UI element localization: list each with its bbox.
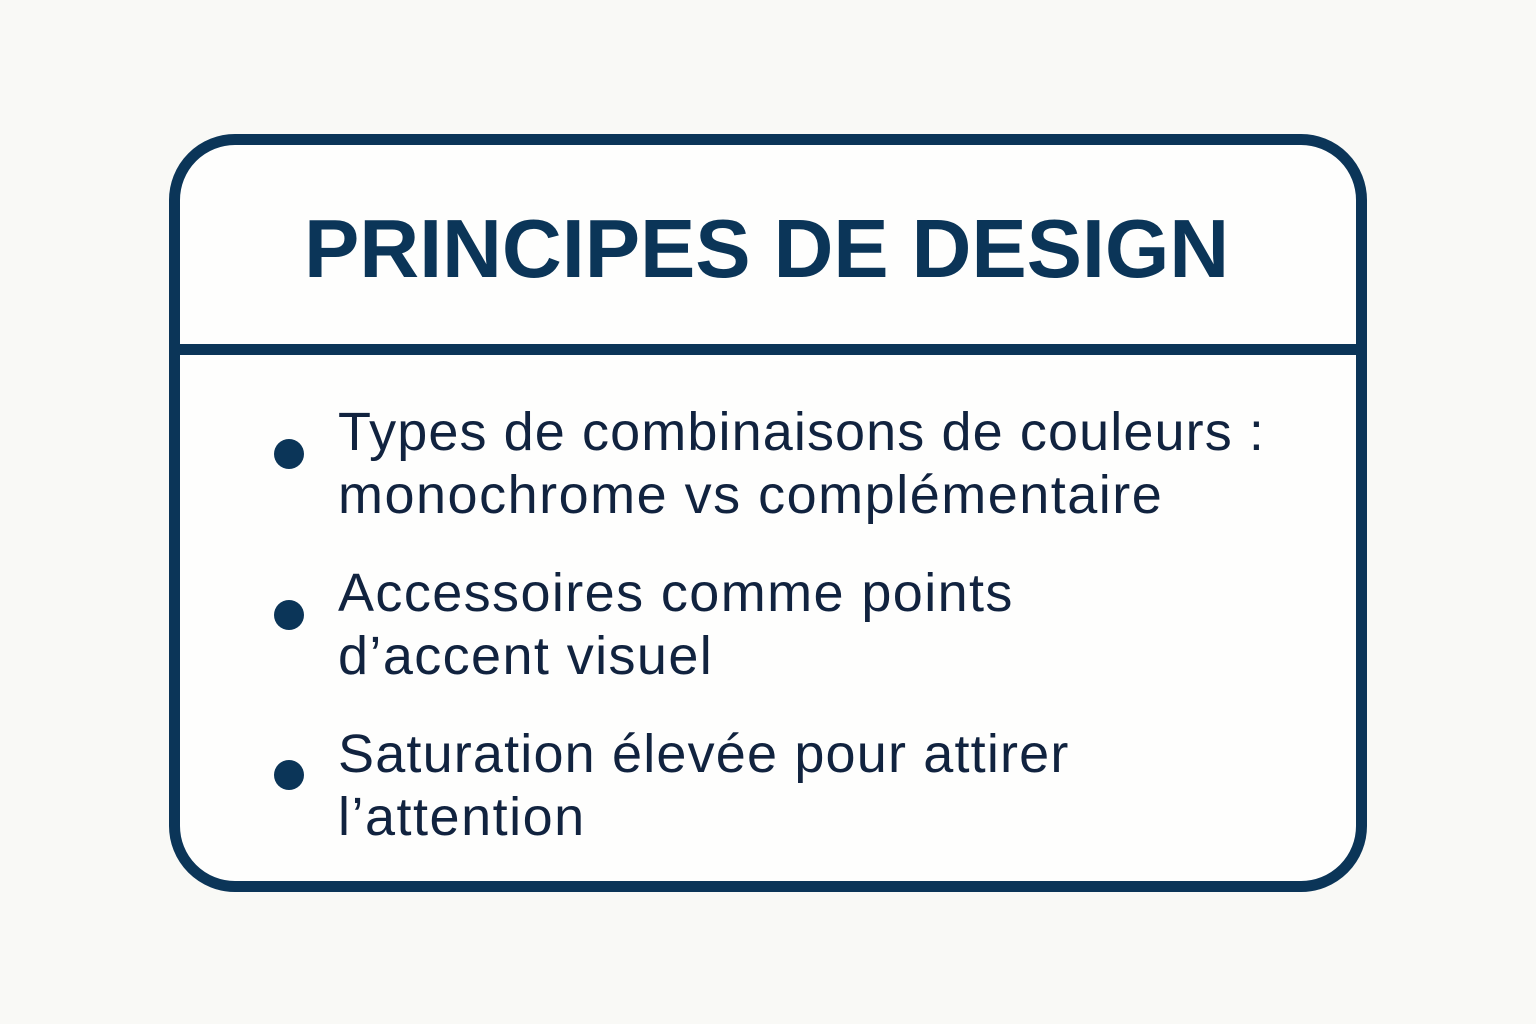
bullet icon 1 — [274, 439, 304, 469]
text: colour combinations: Types de combinaisons de couleurs : — [338, 402, 1265, 462]
text: accessories: d’accent visuel — [338, 626, 713, 686]
panel: design principles card — [169, 134, 1367, 892]
text: accessories — [338, 563, 1014, 686]
header divider — [175, 344, 1361, 355]
text: saturation: Saturation élevée pour attirer — [338, 724, 1070, 784]
bullet icon 2 — [274, 600, 304, 630]
text: colour combinations: monochrome vs complémentaire — [338, 465, 1163, 525]
text: accessories: Accessoires comme points — [338, 563, 1014, 623]
text: saturation — [338, 724, 1070, 847]
text: colour combinations — [338, 402, 1265, 525]
bullet icon 3 — [274, 760, 304, 790]
title: PRINCIPES DE DESIGN — [304, 202, 1229, 295]
text: saturation: l’attention — [338, 787, 586, 847]
